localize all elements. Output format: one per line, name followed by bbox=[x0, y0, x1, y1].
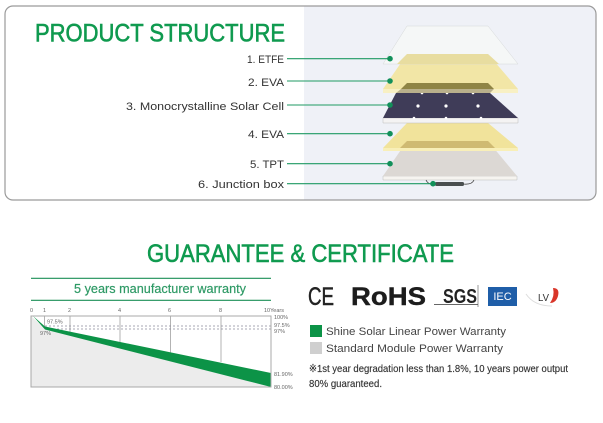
axis labels: 97% bbox=[274, 329, 285, 335]
grey standard module area bbox=[31, 316, 271, 387]
layer labels: 1. ETFE bbox=[247, 54, 284, 66]
layer labels: 5. TPT bbox=[250, 159, 284, 171]
footnote: ※1st year degradation less than 1.8%, 10 years power output bbox=[309, 363, 568, 375]
leader lines bbox=[287, 56, 436, 187]
layer: solar cell bbox=[383, 92, 518, 123]
axis labels: 4 bbox=[118, 308, 121, 314]
logo: LVD bbox=[526, 288, 558, 306]
logo: IEC: IEC bbox=[493, 291, 512, 303]
panel: product structure bbox=[5, 6, 596, 200]
grid lines bbox=[44, 316, 221, 362]
axis labels: 10Years bbox=[264, 308, 284, 314]
warranty heading: 5 years manufacturer warranty bbox=[74, 281, 246, 296]
legend: shine solar: Shine Solar Linear Power Warranty bbox=[326, 326, 507, 338]
logo: CE: CE bbox=[308, 283, 334, 311]
axis labels: 97.5% bbox=[47, 320, 63, 326]
footnote bbox=[309, 363, 568, 390]
warranty chart bbox=[30, 308, 293, 391]
layer: EVA lower bbox=[383, 123, 518, 151]
layer labels: 6. Junction box bbox=[198, 179, 285, 191]
title: guarantee and certificate: GUARANTEE & CERTIFICATE bbox=[147, 240, 454, 268]
dotted reference lines bbox=[45, 326, 271, 329]
title: product structure: PRODUCT STRUCTURE bbox=[35, 20, 285, 48]
layer: TPT bbox=[383, 141, 517, 180]
layer labels bbox=[126, 54, 285, 191]
axis labels: 81.90% bbox=[274, 372, 293, 378]
footnote: 80% guaranteed. bbox=[309, 378, 382, 390]
logo: RoHS: RoHS bbox=[351, 283, 426, 311]
layer labels: 4. EVA bbox=[248, 129, 285, 141]
axis labels bbox=[30, 308, 293, 391]
green warranty band bbox=[33, 316, 271, 387]
logo: LVD: LV bbox=[538, 292, 549, 304]
axis labels: 100% bbox=[274, 315, 288, 321]
axis labels: 97% bbox=[40, 331, 51, 337]
axis labels: 97.5% bbox=[274, 323, 290, 329]
layer: EVA upper bbox=[383, 54, 518, 93]
layer labels: 2. EVA bbox=[248, 77, 285, 89]
axis labels: 2 bbox=[68, 308, 71, 314]
axis labels: 1 bbox=[43, 308, 46, 314]
certification logos bbox=[308, 283, 558, 311]
layer: ETFE bbox=[383, 26, 518, 64]
axis labels: 0 bbox=[30, 308, 33, 314]
axis labels: 8 bbox=[219, 308, 222, 314]
layer labels: 3. Monocrystalline Solar Cell bbox=[126, 101, 284, 113]
logo: SGS: SGS bbox=[443, 286, 477, 308]
legend: standard module: Standard Module Power Warranty bbox=[326, 343, 504, 355]
logo: IEC bbox=[488, 287, 517, 306]
legend bbox=[310, 325, 507, 355]
chart frame bbox=[31, 316, 271, 387]
axis labels: 80.00% bbox=[274, 385, 293, 391]
junction box bbox=[426, 180, 474, 186]
exploded layers diagram bbox=[383, 26, 518, 186]
axis labels: 6 bbox=[168, 308, 171, 314]
logo: SGS bbox=[434, 285, 478, 308]
